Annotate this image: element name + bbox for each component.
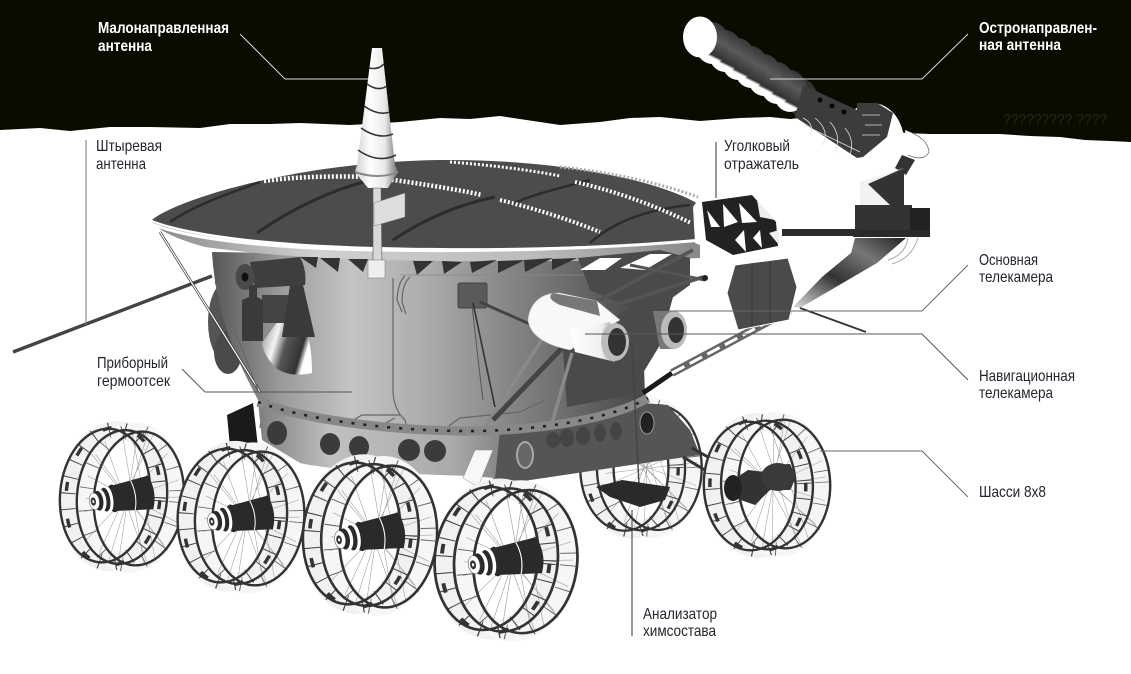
white right bracket xyxy=(463,450,493,487)
solar lid top xyxy=(152,160,702,248)
lid ribs xyxy=(170,162,698,243)
label: navigation camera xyxy=(979,368,1075,402)
label: chemical analyzer: химсостава xyxy=(643,623,716,640)
label: instrument compartment: гермоотсек xyxy=(97,373,171,390)
label: high-gain antenna xyxy=(979,20,1097,54)
long boom strut xyxy=(643,310,790,393)
instrument tank xyxy=(212,252,645,431)
main and navigation cameras xyxy=(528,293,687,362)
label: corner reflector xyxy=(724,138,799,173)
camera pedestal wedge xyxy=(563,297,673,407)
label: chassis: Шасси 8х8 xyxy=(979,484,1046,501)
tank top connector pipe xyxy=(400,274,640,276)
side camera on tank xyxy=(236,257,315,375)
connector box on tank xyxy=(458,283,487,308)
label: main camera: телекамера xyxy=(979,269,1053,286)
lid rim underside xyxy=(152,222,700,261)
tank seam and cables xyxy=(260,276,545,448)
label: chemical analyzer: Анализатор xyxy=(643,606,717,623)
mast with flag panel xyxy=(368,188,405,278)
wheel 1 xyxy=(54,423,190,571)
antenna mount sphere xyxy=(795,85,929,181)
label: corner reflector: Уголковый xyxy=(724,138,790,155)
triangles under lid xyxy=(300,257,577,275)
label: whip antenna: Штыревая xyxy=(96,138,162,155)
wheel 3 xyxy=(297,456,443,614)
label: low-gain antenna: антенна xyxy=(98,38,152,55)
thin rod xyxy=(800,308,866,332)
wheel 2 xyxy=(172,443,310,591)
label: corner reflector: отражатель xyxy=(724,156,799,173)
label: main camera xyxy=(979,252,1053,286)
right lower body xyxy=(490,403,700,482)
label: navigation camera: телекамера xyxy=(979,385,1053,402)
sky: black torn background strip xyxy=(0,0,1131,142)
faint caption on the black strip: ????????? ???? xyxy=(1003,112,1107,129)
label: chemical analyzer xyxy=(643,606,717,640)
label: main camera: Основная xyxy=(979,252,1038,269)
label: instrument compartment: Приборный xyxy=(97,355,168,372)
rear dish behind the tank xyxy=(208,282,244,374)
label: high-gain antenna: Остронаправлен- xyxy=(979,20,1097,37)
wheel link rods xyxy=(683,448,740,488)
horizontal arm xyxy=(782,229,860,236)
rear wheel xyxy=(568,392,714,544)
right front wheel xyxy=(689,405,845,565)
whip antenna xyxy=(13,276,212,352)
truss struts xyxy=(472,250,708,505)
label: low-gain antenna: Малонаправленная xyxy=(98,20,229,37)
label: low-gain antenna xyxy=(98,20,229,55)
bolted ring xyxy=(258,398,648,431)
antenna pedestal xyxy=(853,168,930,237)
label: whip antenna xyxy=(96,138,162,173)
lower chassis section xyxy=(258,402,500,478)
antenna boom arm xyxy=(793,238,918,308)
label: high-gain antenna: ная антенна xyxy=(979,37,1061,54)
low-gain antenna: spiral cone xyxy=(355,48,398,188)
wheel 4 xyxy=(428,481,584,639)
left struts and rods xyxy=(160,232,260,392)
chassis ports xyxy=(267,412,654,469)
leader lines xyxy=(86,34,968,636)
label: navigation camera: Навигационная xyxy=(979,368,1075,385)
folded solar panel xyxy=(727,258,797,330)
label: whip antenna: антенна xyxy=(96,156,146,173)
corner reflector xyxy=(693,190,782,262)
upper truss and white gaps xyxy=(578,250,690,307)
chemical analyzer box xyxy=(596,480,670,507)
dark left bracket xyxy=(227,403,258,447)
high-gain antenna: stacked discs xyxy=(683,16,817,117)
label: instrument compartment xyxy=(97,355,171,390)
